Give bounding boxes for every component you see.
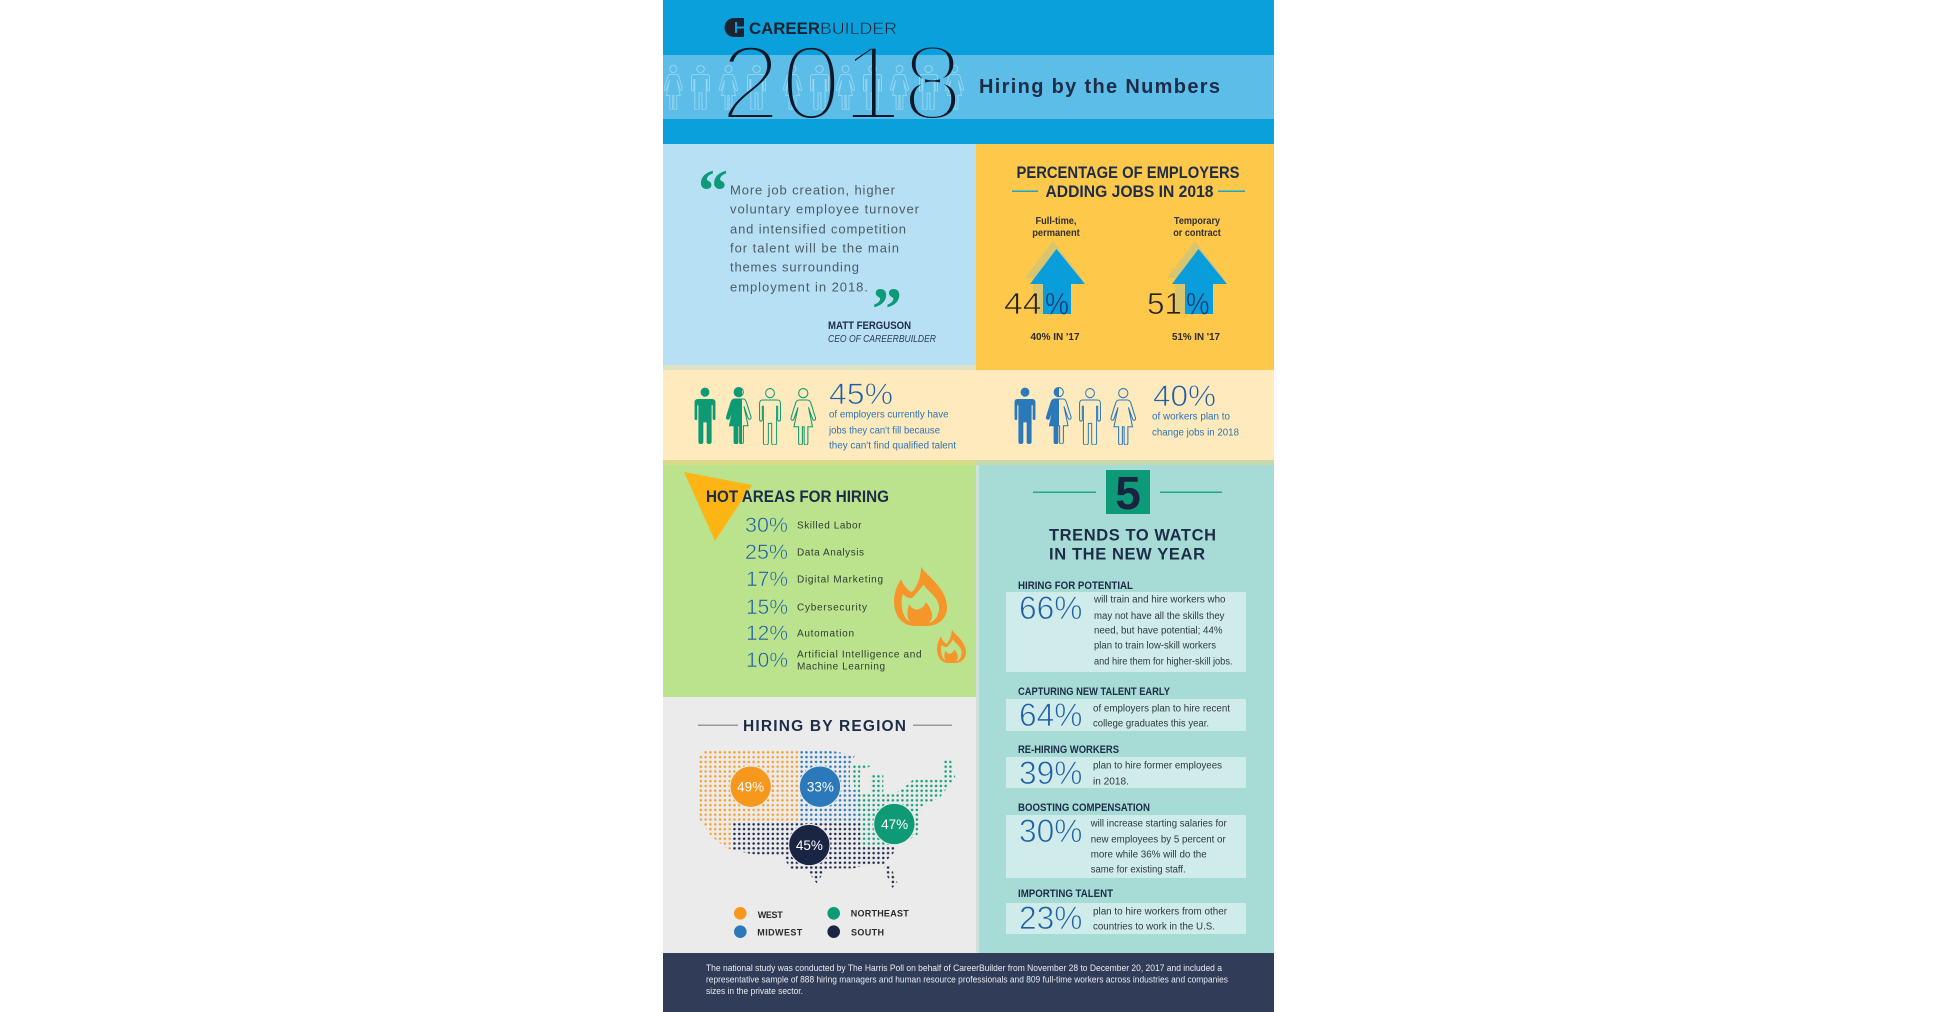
logo: CareerBuilder — [724, 18, 897, 38]
temporary arrow stat: Temporary — [1174, 216, 1220, 227]
icon: blue figures — [1015, 388, 1136, 445]
trend: importing talent: IMPORTING TALENT — [1018, 888, 1113, 900]
trend: re-hiring workers: in 2018. — [1093, 776, 1129, 788]
header banner — [663, 0, 1274, 144]
trend: importing talent: countries to work in the U.S. — [1093, 922, 1215, 932]
badge: number 5 — [1033, 467, 1222, 519]
trend: capturing new talent early: 64% — [1019, 697, 1082, 733]
full-time arrow stat: 44 — [1004, 286, 1042, 321]
trend: hiring for potential: 66% — [1019, 590, 1082, 626]
heading: PERCENTAGE OF EMPLOYERS — [1016, 164, 1240, 182]
list of labels: Automation — [797, 628, 854, 640]
south bubble: 45% — [796, 837, 823, 853]
heading: TRENDS TO WATCH — [1049, 526, 1216, 544]
list of percentages: 30% — [745, 514, 788, 537]
temporary arrow stat: 51 — [1147, 286, 1182, 321]
stat: 45 percent of employers: 45% — [829, 378, 893, 411]
trend: re-hiring workers: plan to hire former employees — [1093, 760, 1222, 772]
full-time arrow stat: permanent — [1032, 228, 1080, 239]
stat: 45 percent of employers: of employers currently have — [829, 410, 949, 420]
trend: capturing new talent early: CAPTURING NEW TALENT EARLY — [1018, 686, 1171, 698]
icon: small flame — [937, 629, 966, 663]
quote text — [730, 182, 920, 294]
heading: IN THE NEW YEAR — [1049, 546, 1205, 564]
quote attribution — [828, 320, 936, 345]
row of pale people outlines — [664, 65, 964, 110]
trend: hiring for potential: plan to train low-skill workers — [1094, 640, 1216, 652]
icon: orange triangle — [684, 472, 752, 541]
panel: hiring by region — [663, 697, 976, 953]
northeast bubble: 47% — [881, 816, 908, 832]
heading: HIRING BY REGION — [743, 718, 906, 735]
trend: boosting compensation: 30% — [1019, 813, 1082, 849]
panel: beige stats strip — [663, 370, 1274, 465]
logo: CareerBuilder: CAREER — [749, 19, 820, 38]
list of labels — [797, 520, 922, 672]
list of labels: Data Analysis — [797, 548, 864, 558]
quote text: themes surrounding — [730, 260, 859, 274]
temporary arrow stat: % — [1186, 286, 1210, 321]
footer note: sizes in the private sector. — [706, 986, 803, 996]
quote attribution: CEO OF CAREERBUILDER — [828, 333, 936, 345]
south bubble — [789, 824, 830, 866]
trend: capturing new talent early — [1006, 686, 1246, 733]
stat: 45 percent of employers: they can't find qualified talent — [829, 440, 956, 452]
trend: re-hiring workers: 39% — [1019, 755, 1082, 791]
trend: boosting compensation: same for existing staff. — [1091, 864, 1186, 876]
temporary arrow stat — [1147, 216, 1227, 343]
quote attribution: MATT FERGUSON — [828, 320, 911, 332]
stat: 40 percent of workers — [1015, 380, 1239, 445]
trend: hiring for potential: will train and hire workers who — [1093, 594, 1226, 606]
trend: boosting compensation: more while 36% will do the — [1091, 850, 1207, 860]
panel: five trends — [976, 465, 1274, 953]
quote text: for talent will be the main — [730, 240, 899, 256]
legend: WEST — [758, 910, 783, 920]
temporary arrow stat: or contract — [1173, 228, 1221, 239]
footer note — [663, 953, 1274, 1012]
year title 2018 — [728, 48, 956, 118]
full-time arrow stat: Full-time, — [1036, 216, 1077, 227]
list of percentages: 17% — [746, 568, 788, 591]
stat: 45 percent of employers — [695, 378, 956, 452]
icon: green figures — [695, 388, 816, 445]
temporary arrow stat: 51% IN '17 — [1172, 331, 1220, 343]
list of percentages — [745, 514, 788, 672]
quote text: More job creation, higher — [730, 182, 896, 198]
list of percentages: 12% — [746, 622, 788, 645]
trend: capturing new talent early: college graduates this year. — [1093, 718, 1209, 730]
stat: 45 percent of employers: jobs they can't fill because — [828, 426, 940, 436]
west bubble: 49% — [737, 779, 764, 795]
footer note: representative sample of 888 hiring managers and human resource professionals and 809 full-time workers across industries and companies — [706, 974, 1228, 984]
northeast bubble — [874, 803, 915, 845]
legend: NORTHEAST — [851, 908, 909, 918]
full-time arrow stat: 40% IN '17 — [1030, 331, 1080, 343]
logo: CareerBuilder: BUILDER — [820, 19, 897, 38]
list of labels: Machine Learning — [797, 662, 885, 672]
trend: hiring for potential: and hire them for higher-skill jobs. — [1094, 656, 1232, 668]
list of percentages: 25% — [745, 541, 788, 564]
heading — [1049, 526, 1216, 564]
trend: re-hiring workers — [1006, 744, 1246, 791]
list of labels: Cybersecurity — [797, 602, 867, 614]
list of labels: Artificial Intelligence and — [797, 650, 922, 660]
legend: MIDWEST — [757, 928, 803, 938]
panel: quote — [663, 144, 976, 370]
trend: importing talent: plan to hire workers from other — [1093, 906, 1228, 918]
list of percentages: 10% — [746, 649, 788, 672]
quote text: employment in 2018. — [730, 280, 868, 294]
midwest bubble — [799, 766, 841, 807]
trend: importing talent — [1006, 888, 1246, 936]
trend: re-hiring workers: RE-HIRING WORKERS — [1018, 744, 1119, 756]
list of percentages: 15% — [746, 596, 788, 619]
icon: closing quote: ” — [872, 276, 902, 342]
midwest bubble: 33% — [807, 779, 834, 795]
heading: HOT AREAS FOR HIRING — [706, 487, 889, 506]
trend: boosting compensation: BOOSTING COMPENSATION — [1018, 802, 1150, 814]
trend: capturing new talent early: of employers plan to hire recent — [1093, 704, 1230, 714]
list of labels: Skilled Labor — [797, 520, 862, 532]
panel: hot areas for hiring — [663, 465, 976, 697]
legend: SOUTH — [851, 928, 884, 938]
stat: 40 percent of workers: of workers plan to — [1152, 412, 1230, 422]
badge: number 5: 5 — [1115, 467, 1141, 519]
quote text: and intensified competition — [730, 222, 906, 236]
heading: ADDING JOBS IN 2018 — [1046, 183, 1214, 201]
legend — [734, 907, 909, 938]
trend: boosting compensation: will increase starting salaries for — [1090, 818, 1227, 830]
map: dotted US regions — [698, 751, 955, 888]
full-time arrow stat: % — [1045, 286, 1069, 321]
panel: percentage of employers adding jobs — [976, 144, 1274, 370]
trend: hiring for potential: HIRING FOR POTENTIAL — [1018, 580, 1133, 592]
west bubble — [730, 766, 771, 807]
trend: boosting compensation: new employees by 5 percent or — [1091, 834, 1226, 846]
trend: hiring for potential: need, but have potential; 44% — [1094, 626, 1223, 636]
trend: hiring for potential — [1006, 580, 1246, 672]
list of labels: Digital Marketing — [797, 574, 883, 586]
trend: importing talent: 23% — [1019, 900, 1082, 936]
icon: large flame — [894, 566, 947, 626]
quote text: voluntary employee turnover — [730, 202, 920, 216]
heading — [1012, 164, 1245, 201]
stat: 40 percent of workers: 40% — [1153, 380, 1216, 413]
footer note: The national study was conducted by The Harris Poll on behalf of CareerBuilder from November 28 to December 20, 2017 and included a — [706, 963, 1222, 973]
subtitle: Hiring by the Numbers — [979, 76, 1220, 98]
icon: opening quote: “ — [698, 158, 728, 224]
trend: boosting compensation — [1006, 802, 1246, 878]
full-time arrow stat — [1004, 216, 1085, 343]
trend: hiring for potential: may not have all the skills they — [1094, 611, 1224, 622]
stat: 40 percent of workers: change jobs in 2018 — [1152, 428, 1239, 438]
